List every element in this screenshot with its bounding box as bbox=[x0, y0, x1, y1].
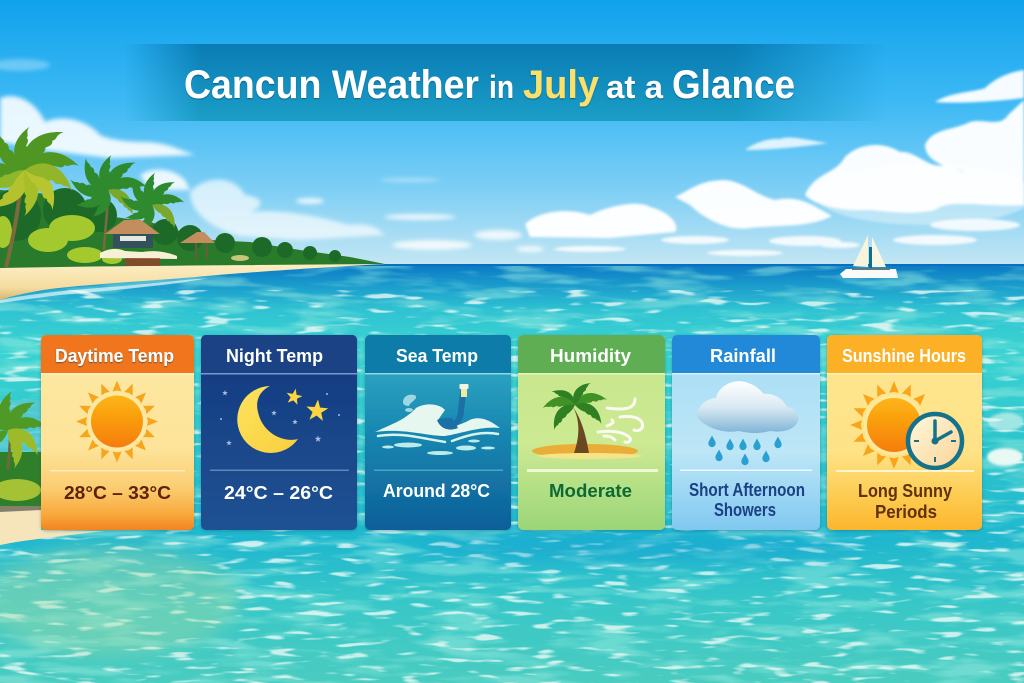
icon: palm on island with wind bbox=[532, 379, 643, 459]
value: humidity: Moderate bbox=[549, 481, 632, 501]
title text: July bbox=[523, 63, 600, 107]
value: rainfall: Showers bbox=[714, 500, 776, 520]
clouds: left bbox=[0, 59, 544, 252]
big palm bbox=[0, 122, 79, 217]
panel: humidity bbox=[518, 335, 665, 530]
header: sunshine hours bbox=[827, 335, 982, 373]
icon: rain cloud bbox=[697, 381, 798, 465]
title text: Glance bbox=[672, 63, 795, 107]
middle palm bbox=[67, 154, 147, 221]
header: humidity: Humidity bbox=[550, 346, 631, 366]
sailboat bbox=[840, 235, 898, 278]
panel: sea temp bbox=[365, 335, 511, 530]
title text bbox=[184, 63, 795, 107]
header: sea temp: Sea Temp bbox=[396, 346, 478, 366]
header: night temp bbox=[201, 335, 357, 373]
gazebo bbox=[180, 232, 215, 259]
header: daytime temp bbox=[41, 335, 194, 373]
sandy beach bbox=[0, 264, 385, 300]
value: sunshine hours: Long Sunny bbox=[858, 481, 952, 501]
panel: rainfall bbox=[672, 335, 820, 530]
header: rainfall bbox=[672, 335, 820, 373]
value: rainfall: Short Afternoon bbox=[689, 480, 805, 500]
clock bbox=[908, 414, 962, 468]
header: humidity bbox=[518, 335, 665, 373]
icon: sun bbox=[76, 380, 158, 462]
title text: at a bbox=[606, 69, 663, 105]
header: sea temp bbox=[365, 335, 511, 373]
value: sunshine hours bbox=[858, 481, 952, 522]
sea bbox=[0, 264, 1024, 683]
palm trunks bbox=[6, 170, 152, 267]
right-edge surf highlights bbox=[987, 413, 1024, 466]
title text: in bbox=[489, 69, 514, 105]
panel: night temp bbox=[201, 335, 357, 530]
value: night temp: 24°C – 26°C bbox=[224, 483, 333, 503]
sky background bbox=[0, 0, 1024, 265]
small palm bbox=[118, 171, 184, 234]
panel: sunshine hours bbox=[827, 335, 982, 530]
beach house bbox=[100, 220, 177, 266]
jungle bbox=[0, 188, 385, 272]
value: daytime temp: 28°C – 33°C bbox=[64, 483, 171, 503]
panel: daytime temp bbox=[41, 335, 194, 530]
title band bbox=[125, 44, 885, 121]
clouds: right bbox=[525, 70, 1024, 256]
header: rainfall: Rainfall bbox=[710, 346, 776, 366]
value: sea temp: Around 28°C bbox=[383, 481, 490, 501]
header: daytime temp: Daytime Temp bbox=[55, 346, 174, 366]
value: rainfall bbox=[689, 480, 805, 520]
lower-left shore with palm bbox=[0, 389, 105, 545]
icon: wave and snorkel bbox=[375, 384, 500, 455]
title text: Cancun Weather bbox=[184, 63, 479, 107]
header: night temp: Night Temp bbox=[226, 346, 323, 366]
beach scene: left shore bbox=[0, 122, 385, 303]
header: sunshine hours: Sunshine Hours bbox=[842, 346, 966, 366]
icon: sun with clock bbox=[850, 381, 962, 469]
icon: crescent moon and stars bbox=[220, 386, 340, 453]
value: sunshine hours: Periods bbox=[875, 502, 937, 522]
